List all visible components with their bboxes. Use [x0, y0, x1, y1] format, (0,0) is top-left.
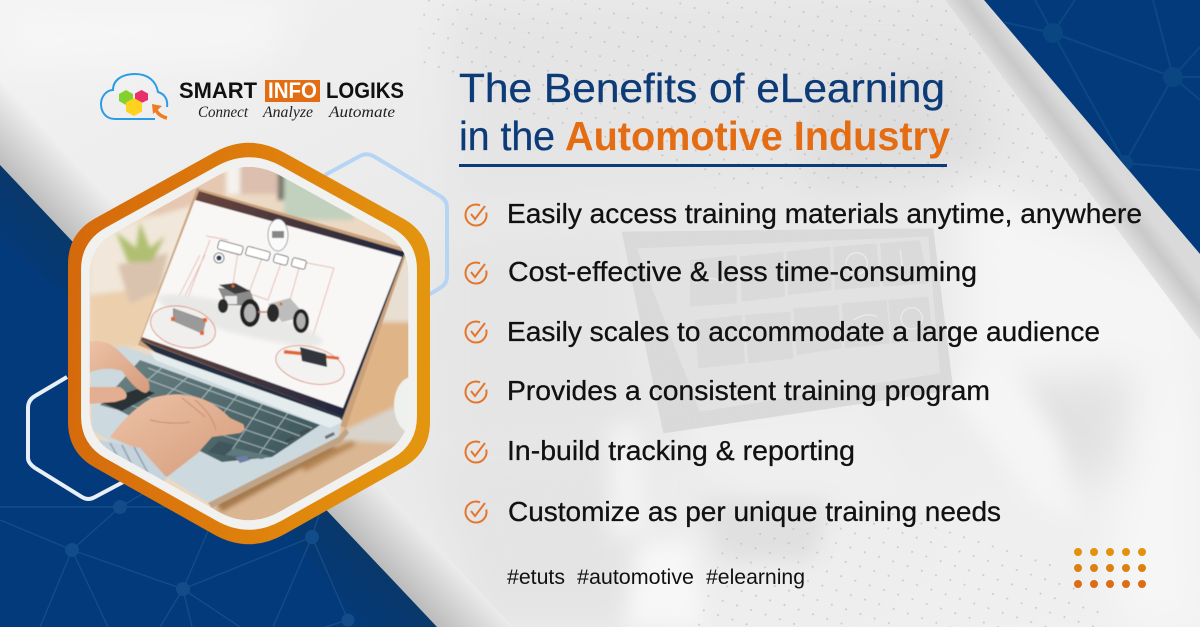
logo tagline: Connect	[198, 104, 249, 121]
motor module	[274, 344, 346, 386]
hands typing	[88, 341, 244, 483]
benefit 6: Customize as per unique training needs	[508, 496, 1001, 527]
car chassis	[218, 283, 309, 333]
logo tagline: Analyze	[262, 104, 313, 121]
title underline	[459, 164, 947, 167]
diagonal ribbon: top right	[945, 0, 1200, 340]
laptop lid and screen	[138, 188, 408, 428]
benefit 5: In-build tracking & reporting	[507, 435, 855, 466]
benefit 2: Cost-effective & less time-consuming	[508, 256, 977, 287]
title: The Benefits of eLearning	[459, 65, 945, 111]
benefits list	[466, 198, 1142, 527]
benefit 1: Easily access training materials anytime, anywhere	[507, 198, 1142, 229]
benefit 3: Easily scales to accommodate a large audience	[507, 316, 1100, 347]
blue corner: bottom left with network	[0, 165, 437, 627]
background: tablet screen	[622, 228, 953, 433]
orange dot grid	[1074, 548, 1146, 588]
screen diagram	[146, 219, 348, 391]
blue corner: top right with network	[984, 0, 1200, 254]
background: dotted texture	[420, 0, 1150, 627]
coffee cup	[393, 377, 408, 431]
logo tagline: Automate	[328, 104, 395, 121]
logo icon: cloud with hexagons and arrow	[101, 74, 167, 119]
hexagon photo frame: orange and white borders	[68, 143, 430, 544]
laptop base and keyboard	[90, 345, 342, 503]
benefit 4: Provides a consistent training program	[507, 375, 990, 406]
hashtags: #automotive	[577, 566, 694, 589]
hashtags: #elearning	[706, 566, 805, 589]
logo wordmark: LOGIKS	[326, 78, 404, 103]
title: Automotive Industry	[565, 113, 950, 159]
hashtags: #etuts	[507, 566, 565, 589]
battery module	[150, 305, 216, 349]
decorative hexagon outline: white	[28, 377, 127, 499]
logo: Smart Info Logiks	[101, 74, 404, 121]
potted plant	[116, 222, 168, 304]
logo tagline	[198, 104, 395, 121]
decorative hexagon outline: light blue	[325, 154, 447, 297]
logo wordmark	[179, 78, 404, 103]
diagonal ribbon: bottom left	[0, 80, 513, 627]
logo wordmark: SMART	[179, 78, 258, 103]
title: in the	[459, 113, 555, 159]
blurred room behind the laptop	[90, 167, 408, 520]
title	[459, 65, 950, 159]
photo: laptop showing automotive eLearning diagram	[90, 166, 408, 520]
logo wordmark: INFO	[268, 78, 317, 103]
hashtags	[507, 566, 805, 589]
